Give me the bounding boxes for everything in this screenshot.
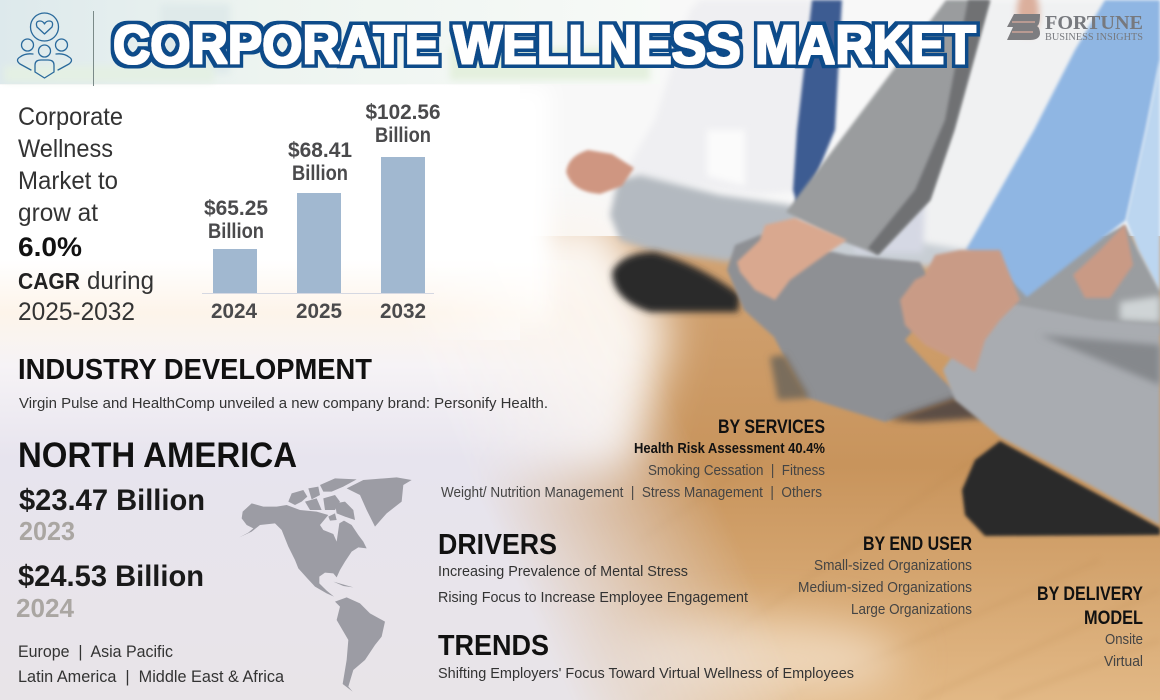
wood floor (400, 236, 1160, 700)
bar chart: Billion (292, 162, 348, 185)
icon: people with heart (18, 13, 72, 78)
man centre: hand (737, 218, 847, 300)
drivers: Increasing Prevalence of Mental Stress (438, 563, 688, 580)
man left: trousers (610, 175, 805, 262)
by delivery model: Virtual (1104, 653, 1143, 670)
man centre: jacket (786, 0, 990, 255)
CAGR statement: grow at (18, 199, 98, 227)
man right: rear trousers (990, 225, 1160, 335)
north america block: 2023 (19, 516, 75, 546)
man centre: trousers (727, 235, 962, 422)
bar chart: $65.25 (204, 197, 268, 220)
bar chart: $68.41 (288, 139, 352, 162)
north america block: $24.53 Billion (18, 560, 204, 593)
man left: shoe (612, 252, 740, 312)
bar chart: 2032 (380, 300, 426, 323)
man right: shoe (962, 441, 1160, 536)
logo: Fortune Business Insights (1007, 12, 1143, 43)
man left: shirt (625, 0, 812, 195)
title: CORPORATE WELLNESS MARKET (113, 14, 976, 76)
bar chart: Billion (208, 220, 264, 243)
by delivery model (1037, 584, 1143, 670)
industry development: Virgin Pulse and HealthComp unveiled a new company brand: Personify Health. (19, 395, 548, 412)
man left: tie (793, 0, 842, 215)
trends: Shifting Employers' Focus Toward Virtual Wellness of Employees (438, 665, 854, 682)
man right: blue shirt (966, 0, 1160, 297)
by services: Weight/ Nutrition Management | Stress Management | Others (441, 484, 822, 501)
north america block: 2024 (16, 593, 75, 623)
by end user: Large Organizations (851, 601, 972, 618)
by services: Smoking Cessation | Fitness (648, 462, 825, 479)
drivers: Rising Focus to Increase Employee Engagement (438, 589, 749, 606)
man right: trousers (943, 303, 1160, 525)
man centre: shirt (905, 0, 1110, 250)
drivers (438, 529, 749, 606)
by services: BY SERVICES (718, 417, 825, 438)
north america block (16, 436, 297, 686)
CAGR statement: 6.0% (18, 232, 82, 262)
by delivery model: Onsite (1105, 631, 1143, 648)
by end user: Small-sized Organizations (814, 557, 972, 574)
north america block: Latin America | Middle East & Africa (18, 667, 285, 686)
bar chart (202, 101, 440, 323)
bar chart: 2024 (211, 300, 257, 323)
pale floor glow near window (380, 215, 670, 490)
CAGR statement: Market to (18, 167, 118, 195)
CAGR statement: Corporate (18, 103, 123, 131)
by delivery model: BY DELIVERY (1037, 584, 1143, 605)
by end user: BY END USER (863, 534, 972, 555)
man centre: backing (800, 195, 1030, 267)
bar chart: 2025 (296, 300, 342, 323)
man left: hand (566, 150, 634, 194)
man right: far hand (1073, 224, 1133, 298)
CAGR statement: 2025-2032 (18, 298, 135, 326)
CAGR statement: Wellness (18, 135, 113, 163)
industry development (18, 354, 548, 412)
by services (441, 417, 825, 501)
trends: TRENDS (438, 630, 549, 662)
by delivery model: MODEL (1084, 608, 1143, 629)
north america block: $23.47 Billion (19, 484, 205, 517)
bar chart: $102.56 (366, 101, 440, 124)
white and lavender fade overlay (0, 192, 780, 700)
by end user (798, 534, 972, 618)
man right: hand (900, 250, 1020, 372)
CAGR statement: CAGR (18, 268, 80, 294)
by services: Health Risk Assessment 40.4% (634, 441, 825, 457)
logo: Fortune Business Insights: BUSINESS INSIGHTS (1045, 32, 1143, 43)
north america block: NORTH AMERICA (18, 436, 297, 475)
by end user: Medium-sized Organizations (798, 579, 972, 596)
header divider (93, 11, 94, 86)
logo: Fortune Business Insights: FORTUNE (1045, 12, 1143, 34)
north america block: Europe | Asia Pacific (18, 642, 173, 661)
header band (0, 0, 660, 84)
CAGR statement (18, 103, 154, 326)
industry development: INDUSTRY DEVELOPMENT (18, 354, 372, 386)
bar chart: Billion (375, 124, 431, 147)
trends (438, 630, 854, 682)
map: the Americas (239, 477, 412, 692)
drivers: DRIVERS (438, 529, 557, 561)
CAGR statement: during (87, 267, 154, 295)
